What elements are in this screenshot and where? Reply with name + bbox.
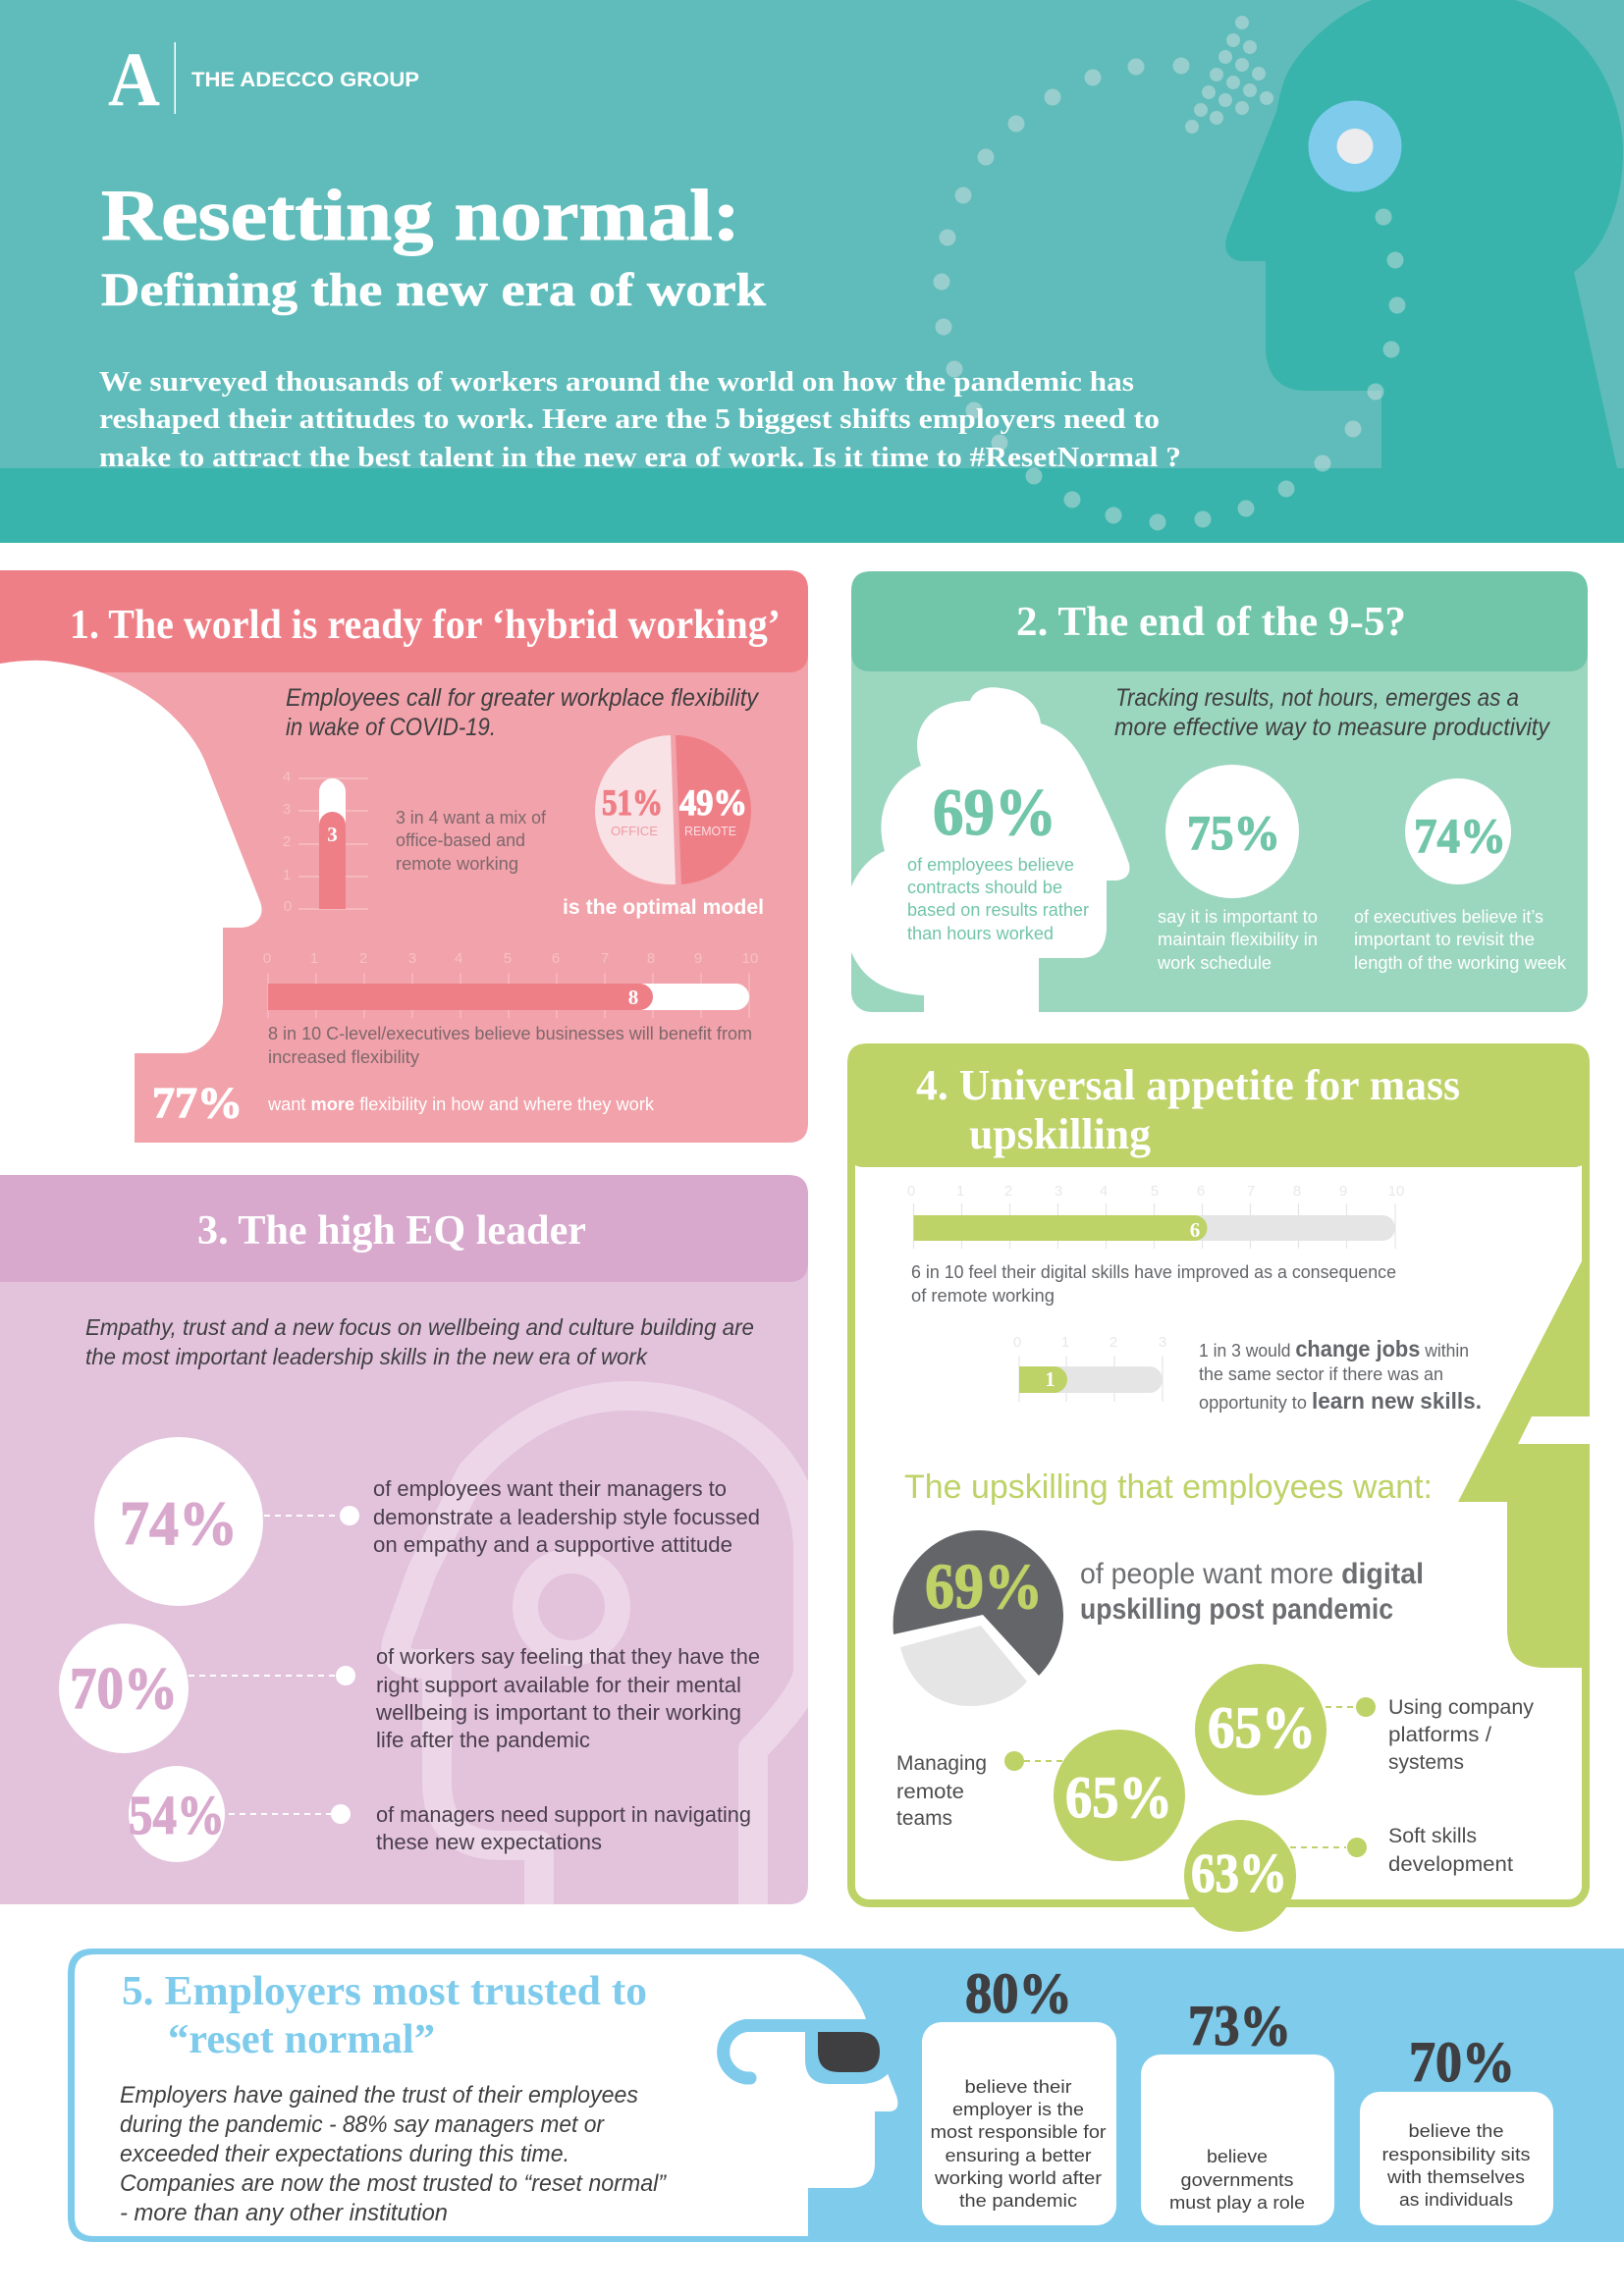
stat: 54%: these new expectations	[376, 1830, 602, 1854]
panel 5 paragraph: during the pandemic - 88% say managers met or	[120, 2111, 605, 2138]
stat: managing remote teams: Managing	[896, 1752, 987, 1775]
intro italic: more effective way to measure productivity	[1114, 714, 1550, 741]
stat: 75%: maintain flexibility in	[1158, 929, 1318, 949]
horizontal bar chart: 8 in 10: 6	[552, 950, 560, 967]
text: 3 in 4: 3 in 4 want a mix of	[396, 808, 547, 828]
card: 80%: believe their	[964, 2077, 1072, 2097]
pie chart: office vs remote: 51%	[602, 783, 663, 824]
stat: soft skills: 63%	[1191, 1843, 1287, 1904]
card: 70%: as individuals	[1399, 2190, 1513, 2210]
bar chart: 1 in 3: 0	[1013, 1334, 1021, 1351]
panel 5 title: “reset normal”	[168, 2017, 435, 2062]
panel 5 paragraph: - more than any other institution	[120, 2200, 448, 2226]
stat: 74%	[94, 1437, 760, 1606]
intro paragraph: reshaped their attitudes to work. Here are the 5 biggest shifts employers need to	[99, 404, 1160, 435]
stat: 70%: life after the pandemic	[376, 1728, 590, 1752]
vertical bar chart: 3 in 4: 2	[283, 833, 291, 850]
intro italic	[1114, 684, 1550, 741]
stat: 54%: 54%	[129, 1786, 225, 1846]
stat: 70%: 70%	[70, 1656, 178, 1721]
intro paragraph	[99, 367, 1181, 473]
stat: company platforms: Using company	[1388, 1696, 1535, 1719]
bar chart: 6 in 10: 2	[1004, 1183, 1012, 1200]
bar chart: 6 in 10: 4	[1100, 1183, 1108, 1200]
text: 8 in 10	[268, 1024, 752, 1067]
stat: 75%: say it is important to	[1158, 906, 1318, 927]
text: 8 in 10: 8 in 10 C-level/executives believe businesses will benefit from	[268, 1024, 752, 1043]
card: 70%	[1360, 2030, 1553, 2225]
pie chart: office vs remote: 49%	[679, 783, 747, 824]
card: 70%: believe the	[1408, 2121, 1504, 2141]
stat: 77%	[152, 1079, 655, 1127]
pie chart: 69%	[893, 1530, 1063, 1706]
panel 5 paragraph: Employers have gained the trust of their employees	[120, 2082, 638, 2109]
stat: 69%: than hours worked	[907, 923, 1054, 943]
white head silhouette	[75, 1954, 897, 2236]
stat: soft skills: development	[1388, 1853, 1513, 1876]
vertical bar chart: 3 in 4: 3	[327, 823, 338, 846]
text: 3 in 4: office-based and	[396, 830, 525, 850]
intro paragraph: We surveyed thousands of workers around the world on how the pandemic has	[99, 367, 1134, 398]
stat: 54%	[129, 1766, 751, 1862]
card: 70%: 70%	[1409, 2030, 1515, 2094]
stat: 69%: contracts should be	[907, 877, 1062, 897]
green head silhouette	[1458, 1259, 1590, 1668]
panel 5 paragraph	[120, 2082, 667, 2226]
horizontal bar chart: 8 in 10: 0	[263, 950, 271, 967]
card: 73%: must play a role	[1169, 2193, 1305, 2213]
stat: managing remote teams	[896, 1730, 1185, 1861]
card: 70%: responsibility sits	[1382, 2145, 1530, 2164]
stat: soft skills: Soft skills	[1388, 1825, 1477, 1847]
pie chart: 69%: 69%	[925, 1551, 1043, 1623]
head outline	[396, 1396, 808, 1904]
head silhouette	[0, 661, 262, 1143]
intro italic: Empathy, trust and a new focus on wellbeing and culture building are	[85, 1314, 754, 1340]
stat: 74%: 74%	[1414, 808, 1506, 863]
head silhouette	[1225, 0, 1624, 471]
horizontal bar chart: 8 in 10	[263, 950, 758, 1018]
bar chart: 1 in 3: 1	[1045, 1367, 1056, 1391]
stat: 74%: length of the working week	[1354, 952, 1567, 973]
bar chart: 6 in 10: 0	[907, 1183, 915, 1200]
panel 5 paragraph: exceeded their expectations during this time.	[120, 2141, 569, 2167]
card: 70%: with themselves	[1386, 2167, 1525, 2187]
panel 3: high EQ leader	[0, 1175, 808, 1904]
intro italic	[85, 1314, 754, 1369]
card: 73%	[1141, 1994, 1334, 2225]
horizontal bar chart: 8 in 10: 4	[455, 950, 462, 967]
text: digital upskilling	[1080, 1558, 1424, 1626]
logo: A	[108, 36, 160, 122]
stat: company platforms: systems	[1388, 1751, 1464, 1774]
panel 4 header: upskilling	[969, 1110, 1151, 1158]
text: 3 in 4: remote working	[396, 854, 518, 874]
bar chart: 6 in 10: 3	[1055, 1183, 1062, 1200]
card: 73%: 73%	[1188, 1994, 1291, 2057]
stat: 75%: work schedule	[1157, 952, 1272, 973]
panel 5 title: 5. Employers most trusted to	[122, 1969, 647, 2014]
bar chart: 6 in 10: 1	[956, 1183, 964, 1200]
stat: 74%: demonstrate a leadership style focussed	[373, 1505, 760, 1529]
card: 80%	[922, 1961, 1116, 2225]
stat: 69%: 69%	[933, 774, 1056, 849]
horizontal bar chart: 8 in 10: 2	[359, 950, 367, 967]
text: 1 in 3: the same sector if there was an	[1199, 1363, 1443, 1384]
text: 1 in 3	[1199, 1336, 1482, 1414]
vertical bar chart: 3 in 4: 1	[283, 867, 291, 883]
stat: 70%	[59, 1624, 760, 1753]
horizontal bar chart: 8 in 10: 8	[628, 986, 638, 1009]
horizontal bar chart: 8 in 10: 5	[504, 950, 512, 967]
bar chart: 1 in 3	[1013, 1334, 1166, 1402]
panel 1 header	[0, 570, 808, 672]
stat: 70%: wellbeing is important to their working	[375, 1700, 741, 1725]
intro italic: Employees call for greater workplace flexibility	[286, 684, 759, 712]
vertical bar chart: 3 in 4: 4	[283, 769, 291, 785]
bar chart: 6 in 10	[907, 1183, 1404, 1249]
panel 1: hybrid working	[0, 570, 808, 1143]
stat: 69%: of employees believe	[907, 854, 1074, 875]
bar chart: 1 in 3: 2	[1110, 1334, 1117, 1351]
horizontal bar chart: 8 in 10: 3	[408, 950, 416, 967]
vertical bar chart: 3 in 4	[283, 769, 368, 915]
panel 5 paragraph: Companies are now the most trusted to “reset normal”	[120, 2170, 667, 2197]
card: 73%: believe	[1207, 2147, 1268, 2166]
text: 1 in 3: 1 in 3 would change jobs within	[1199, 1336, 1469, 1362]
card: 80%: ensuring a better	[945, 2146, 1092, 2165]
bar chart: 6 in 10: 6	[1190, 1218, 1200, 1242]
stat: 70%: right support available for their mental	[376, 1673, 741, 1697]
subtitle: Defining the new era of work	[101, 264, 766, 316]
card: 80%: 80%	[965, 1961, 1072, 2025]
stat: 75%	[1157, 765, 1318, 973]
stat: 70%: of workers say feeling that they have the	[376, 1644, 760, 1669]
text: 6 in 10: 6 in 10 feel their digital skills have improved as a consequence	[911, 1261, 1396, 1282]
horizontal bar chart: 8 in 10: 1	[310, 950, 318, 967]
stat: 69%: based on results rather	[907, 899, 1089, 920]
panel 5 title	[122, 1969, 647, 2062]
panel 2 header: 2. The end of the 9-5?	[1016, 600, 1406, 645]
stat: managing remote teams: teams	[896, 1807, 952, 1830]
dotted path	[933, 16, 1406, 530]
pie chart: office vs remote: OFFICE	[611, 824, 658, 838]
stat: 54%: of managers need support in navigating	[376, 1802, 751, 1827]
panel 5: employers most trusted	[68, 1949, 1624, 2242]
bar chart: 6 in 10: 5	[1151, 1183, 1159, 1200]
vertical bar chart: 3 in 4: 3	[283, 801, 291, 818]
intro italic: the most important leadership skills in the new era of work	[85, 1344, 648, 1369]
panel 2: end of the 9-5	[851, 571, 1588, 1012]
stat: 74%: of employees want their managers to	[373, 1476, 727, 1501]
text: 1 in 3: opportunity to learn new skills.	[1199, 1388, 1482, 1414]
stat: company platforms	[1195, 1664, 1535, 1795]
horizontal bar chart: 8 in 10: 8	[647, 950, 655, 967]
stat: 77%: 77%	[152, 1079, 243, 1127]
text: 8 in 10: increased flexibility	[268, 1047, 419, 1067]
logo	[108, 42, 418, 114]
card: 73%: governments	[1180, 2170, 1294, 2190]
text: 6 in 10	[911, 1261, 1396, 1306]
horizontal bar chart: 8 in 10: 10	[742, 950, 758, 967]
bar chart: 6 in 10: 9	[1339, 1183, 1347, 1200]
stat: 74%: 74%	[120, 1488, 238, 1558]
eye	[1308, 100, 1402, 192]
panel 1 header: 1. The world is ready for ‘hybrid working’	[70, 603, 781, 648]
text: digital upskilling: of people want more digital	[1080, 1558, 1424, 1590]
optimal model label: is the optimal model	[563, 896, 764, 919]
panel 4 header	[847, 1043, 1590, 1167]
stat: managing remote teams: 65%	[1065, 1765, 1172, 1830]
text: 6 in 10: of remote working	[911, 1285, 1055, 1306]
card: 80%: the pandemic	[959, 2191, 1077, 2211]
stat: managing remote teams: remote	[896, 1781, 964, 1803]
stat: company platforms: 65%	[1208, 1695, 1316, 1760]
stat: 74%: on empathy and a supportive attitude	[373, 1532, 732, 1557]
bar chart: 6 in 10: 10	[1388, 1183, 1404, 1200]
stat: 77%: want more flexibility in how and where they work	[267, 1095, 655, 1114]
head with bun	[851, 687, 1129, 1012]
logo: THE ADECCO GROUP	[191, 68, 419, 91]
intro italic	[286, 684, 759, 741]
card: 80%: most responsible for	[931, 2122, 1106, 2142]
panel 3 header: 3. The high EQ leader	[197, 1208, 586, 1254]
header banner	[0, 0, 1624, 543]
intro italic: in wake of COVID-19.	[286, 714, 496, 741]
panel 4: mass upskilling	[847, 1043, 1590, 1932]
stat: 74%	[1354, 778, 1567, 973]
pie chart: office vs remote	[595, 735, 751, 884]
text: 3 in 4	[396, 808, 547, 874]
card: 80%: employer is the	[952, 2100, 1084, 2119]
card: 80%: working world after	[934, 2168, 1102, 2188]
bar chart: 1 in 3: 1	[1061, 1334, 1069, 1351]
text: digital upskilling: upskilling post pandemic	[1080, 1593, 1393, 1626]
bar chart: 6 in 10: 8	[1293, 1183, 1301, 1200]
vertical bar chart: 3 in 4: 0	[284, 898, 292, 915]
bar chart: 1 in 3: 3	[1159, 1334, 1166, 1351]
glasses	[724, 2019, 889, 2084]
pie chart: office vs remote: REMOTE	[684, 824, 736, 838]
intro italic: Tracking results, not hours, emerges as a	[1115, 684, 1519, 712]
title: Resetting normal:	[101, 176, 740, 256]
stat: 69%	[907, 774, 1089, 943]
stat: 75%: 75%	[1187, 805, 1280, 860]
subheading: The upskilling that employees want:	[904, 1468, 1433, 1506]
horizontal bar chart: 8 in 10: 9	[694, 950, 702, 967]
bar chart: 6 in 10: 6	[1197, 1183, 1205, 1200]
panel 4 header: 4. Universal appetite for mass	[916, 1061, 1460, 1109]
stat: company platforms: platforms /	[1388, 1724, 1491, 1746]
stat: 74%: of executives believe it’s	[1354, 906, 1543, 927]
bar chart: 6 in 10: 7	[1247, 1183, 1255, 1200]
stat: soft skills	[1184, 1820, 1513, 1932]
stat: 74%: important to revisit the	[1354, 929, 1535, 949]
intro paragraph: make to attract the best talent in the new era of work. Is it time to #ResetNormal ?	[99, 443, 1181, 473]
panel 3 header	[0, 1175, 808, 1282]
panel 2 header	[851, 571, 1588, 671]
horizontal bar chart: 8 in 10: 7	[601, 950, 609, 967]
